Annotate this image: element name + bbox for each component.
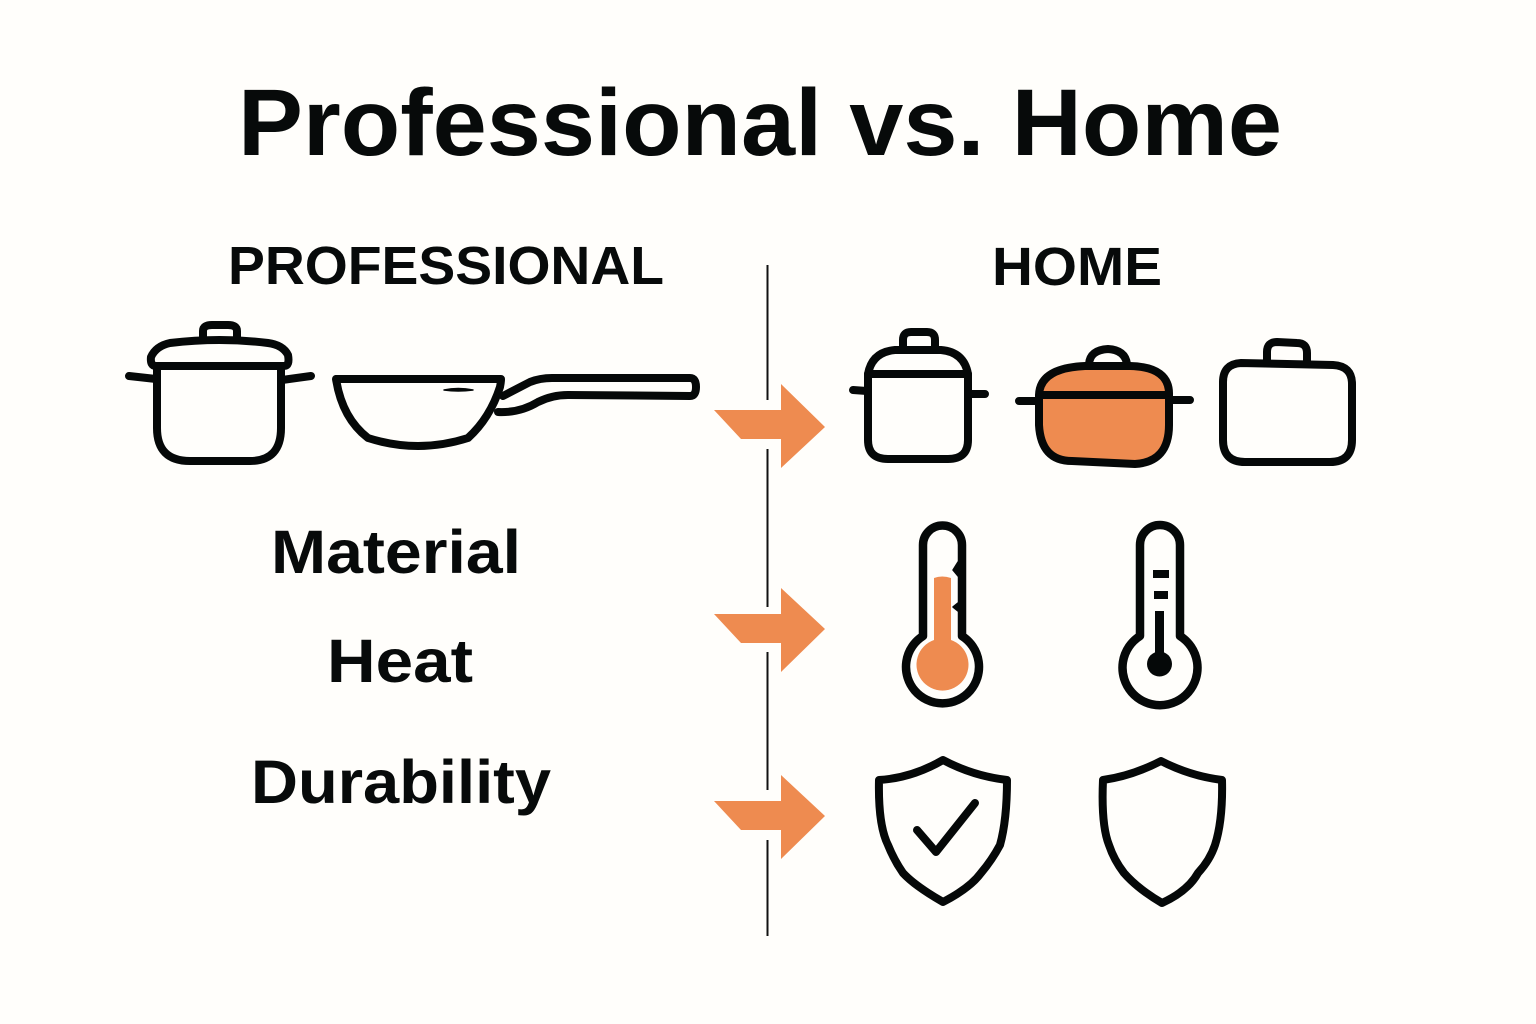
label: heat: Heat [327, 627, 473, 695]
icon: hot thermometer [906, 526, 979, 703]
icon: empty shield [1103, 761, 1222, 903]
icon: home pot 3 [1223, 342, 1352, 462]
icon: cool thermometer [1122, 525, 1198, 705]
title: Professional vs. Home [238, 70, 1282, 176]
arrow: row 1 [714, 384, 825, 468]
arrow: row 2 [714, 588, 825, 672]
icon: home pot 1 [853, 332, 985, 459]
icon: professional frying pan [336, 378, 696, 446]
label: material: Material [271, 518, 521, 586]
label: durability: Durability [251, 748, 551, 816]
icon: professional stock pot [129, 325, 311, 461]
center divider [766, 265, 768, 936]
icon: shield with check [879, 760, 1007, 902]
heading: professional: PROFESSIONAL [228, 236, 664, 296]
icon: home pot 2 orange [1019, 349, 1190, 464]
arrow: row 3 [714, 775, 825, 859]
heading: home: HOME [992, 237, 1162, 297]
